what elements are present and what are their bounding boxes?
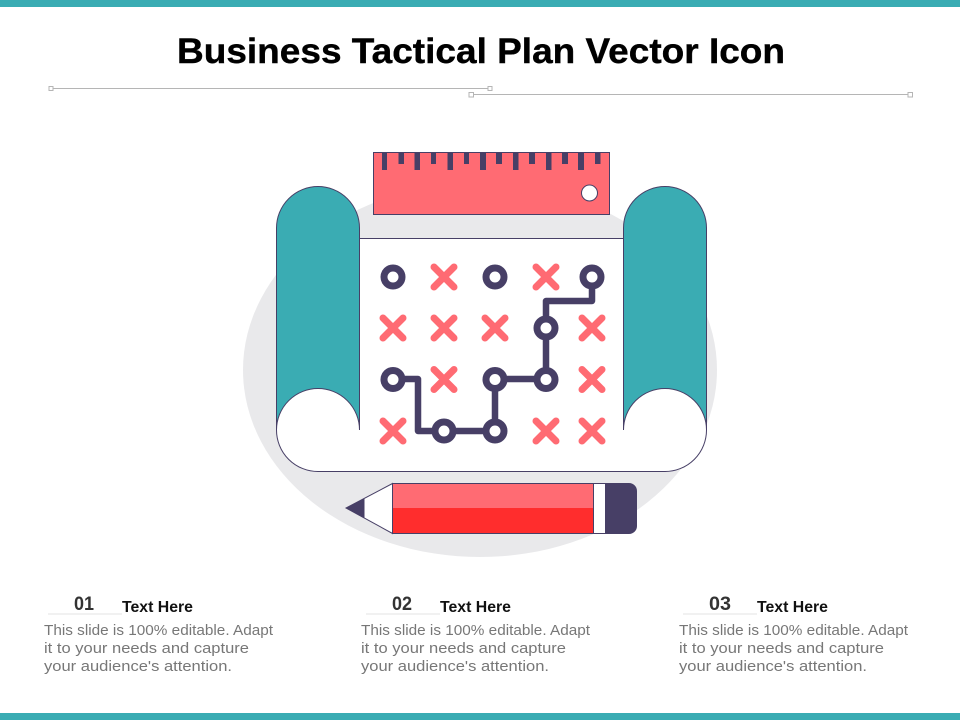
cross marks [383,267,602,441]
bottom accent bar [0,713,960,720]
path connector [393,277,592,431]
right roll [624,186,706,430]
left roll [276,187,360,430]
title connector lines [49,86,912,97]
text block 01 [44,594,273,675]
text block 01: it to your needs and capture [44,641,249,657]
text block 02: 02 [392,594,412,615]
text block 02: your audience's attention. [361,659,549,675]
text block 02: Text Here [440,599,511,616]
background ellipse [243,183,717,557]
text block 01: This slide is 100% editable. Adapt [44,623,273,639]
title: Business Tactical Plan Vector Icon [177,32,785,71]
text block 03: 03 [709,594,731,615]
text block 02: it to your needs and capture [361,641,566,657]
text block 01: Text Here [122,599,193,616]
text block 03 [679,594,908,675]
text block 03: Text Here [757,599,828,616]
text block 02: This slide is 100% editable. Adapt [361,623,590,639]
text block 01: your audience's attention. [44,659,232,675]
circle nodes [384,268,601,440]
text block 03: This slide is 100% editable. Adapt [679,623,908,639]
text block 02 [361,594,590,675]
text block 01: 01 [74,594,94,615]
text block 03: your audience's attention. [679,659,867,675]
text block 03: it to your needs and capture [679,641,884,657]
paper scroll [276,186,706,471]
icon: tactical plan illustration [243,152,717,557]
top accent bar [0,0,960,7]
pencil [346,483,637,534]
ruler [374,152,610,214]
